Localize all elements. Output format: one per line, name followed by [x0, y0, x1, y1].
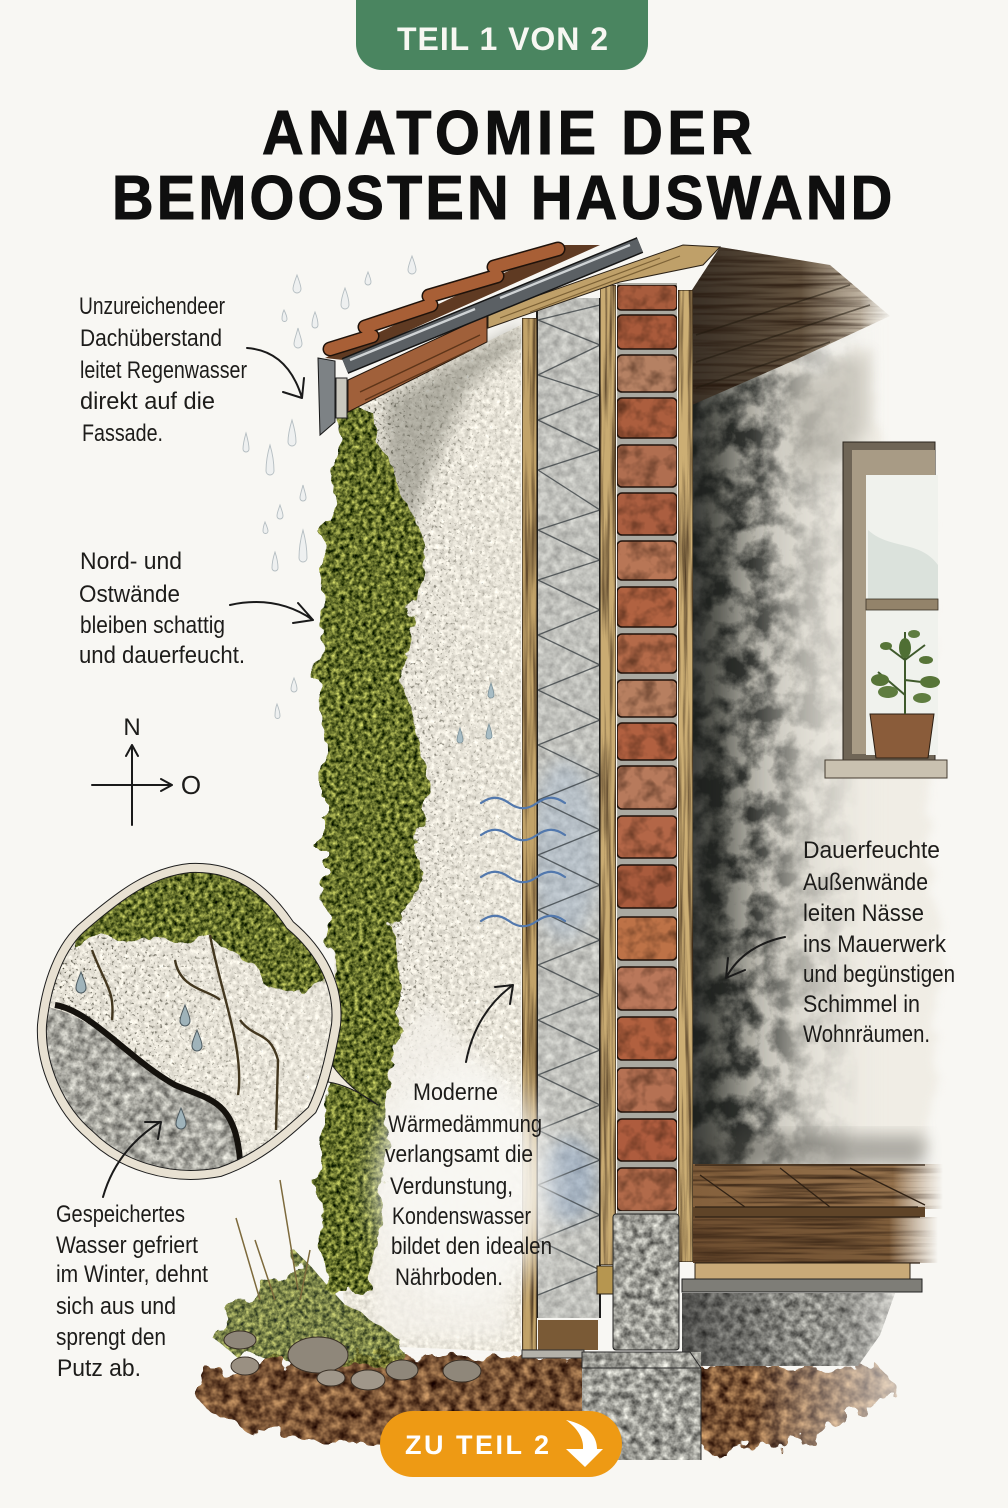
callout: frost damage: sprengt den [56, 1324, 166, 1351]
concrete foundation [582, 1214, 701, 1460]
title [112, 98, 892, 232]
callout: frost damage: Gespeichertes [56, 1201, 185, 1228]
callout: insulation: Kondenswasser [392, 1203, 531, 1230]
callout: north and east walls: Nord- und [80, 548, 182, 575]
callout: north and east walls: Ostwände [79, 581, 180, 608]
icon: curved down arrow [566, 1420, 603, 1467]
callout: damp exterior walls: ins Mauerwerk [803, 931, 947, 958]
soft glow behind insulation callout [380, 1067, 550, 1303]
arrow: to roof edge [247, 348, 304, 398]
callout: damp exterior walls [803, 837, 955, 1048]
title: BEMOOSTEN HAUSWAND [112, 163, 892, 232]
callout: insulation: Verdunstung, [390, 1173, 513, 1200]
callout: roof overhang: Dachüberstand [80, 325, 222, 352]
callout: frost damage: im Winter, dehnt [56, 1261, 208, 1288]
moisture waves [481, 798, 565, 926]
brick column [617, 283, 677, 1215]
callout: roof overhang [79, 293, 247, 447]
exterior plaster [330, 325, 521, 1352]
callout: roof overhang: Unzureichendeer [79, 293, 225, 320]
callout: north and east walls: und dauerfeucht. [79, 642, 245, 669]
interior wall with mold [670, 320, 940, 1190]
arrow: to mold wall [726, 937, 785, 978]
callout: insulation: Wärmedämmung [388, 1111, 542, 1138]
top badge: TEIL 1 VON 2 [397, 21, 608, 57]
wooden battens [522, 285, 693, 1358]
arrow: to insulation [466, 985, 513, 1062]
compass: O [181, 770, 201, 800]
callout: insulation: bildet den idealen [391, 1233, 552, 1260]
arrow: to plaster crack [103, 1122, 161, 1197]
callout: north and east walls [79, 548, 245, 669]
callout: damp exterior walls: Wohnräumen. [803, 1021, 930, 1048]
next part button [380, 1411, 622, 1477]
title: ANATOMIE DER [262, 98, 752, 167]
insulation [531, 298, 600, 1318]
next part button: ZU TEIL 2 [405, 1430, 549, 1460]
top badge [356, 0, 648, 70]
callout: frost damage: Wasser gefriert [56, 1232, 198, 1259]
callout: insulation: Nährboden. [395, 1264, 503, 1291]
compass [92, 714, 201, 825]
callout: frost damage: sich aus und [56, 1293, 176, 1320]
roof [318, 245, 720, 435]
callout: frost damage [56, 1201, 208, 1382]
callout: frost damage: Putz ab. [57, 1355, 141, 1382]
arrow: to moss wall [230, 602, 313, 623]
callout: damp exterior walls: Dauerfeuchte [803, 837, 940, 864]
floor boards [682, 1164, 943, 1366]
callout: damp exterior walls: Schimmel in [803, 991, 920, 1018]
window [825, 442, 947, 778]
callout: damp exterior walls: und begünstigen [803, 961, 955, 988]
callout: roof overhang: leitet Regenwasser [80, 357, 247, 384]
moss [318, 412, 425, 1290]
potted plant [870, 630, 940, 758]
callout: roof overhang: Fassade. [82, 420, 163, 447]
raindrops [243, 256, 494, 743]
ground plants and stones [210, 1180, 481, 1390]
magnifier detail [35, 860, 378, 1185]
callout: roof overhang: direkt auf die [80, 388, 215, 415]
ground soil [195, 1350, 920, 1465]
callout: insulation: Moderne [413, 1079, 498, 1106]
compass: N [123, 714, 141, 741]
callout: damp exterior walls: leiten Nässe [803, 900, 924, 927]
ceiling boards [692, 247, 890, 405]
illustration: wall cross-section [195, 245, 947, 1465]
callout: north and east walls: bleiben schattig [80, 612, 225, 639]
callout: insulation: verlangsamt die [385, 1141, 533, 1168]
callout: damp exterior walls: Außenwände [803, 869, 928, 896]
callout: insulation [385, 1079, 552, 1291]
